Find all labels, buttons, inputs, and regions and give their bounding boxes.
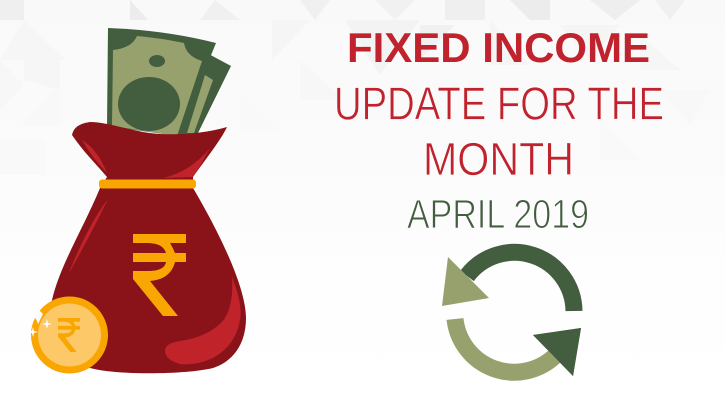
bag band (99, 180, 196, 188)
date: april 2019: APRIL 2019 (407, 191, 589, 237)
bag highlights (68, 140, 241, 364)
icon: rupee symbol on bag (133, 234, 186, 316)
heading: update for the: UPDATE FOR THE (334, 78, 664, 130)
back banknote (178, 52, 231, 135)
icon: circular refresh arrows (442, 252, 581, 376)
bag body (50, 122, 246, 373)
light arc arrow (442, 257, 556, 372)
dark arc arrow (467, 252, 581, 376)
icon: money bag with banknotes (28, 28, 246, 374)
title: fixed income: FIXED INCOME (347, 24, 650, 71)
heading: month: MONTH (423, 133, 574, 185)
front banknote (107, 28, 216, 136)
icon: rupee coin (28, 296, 108, 374)
